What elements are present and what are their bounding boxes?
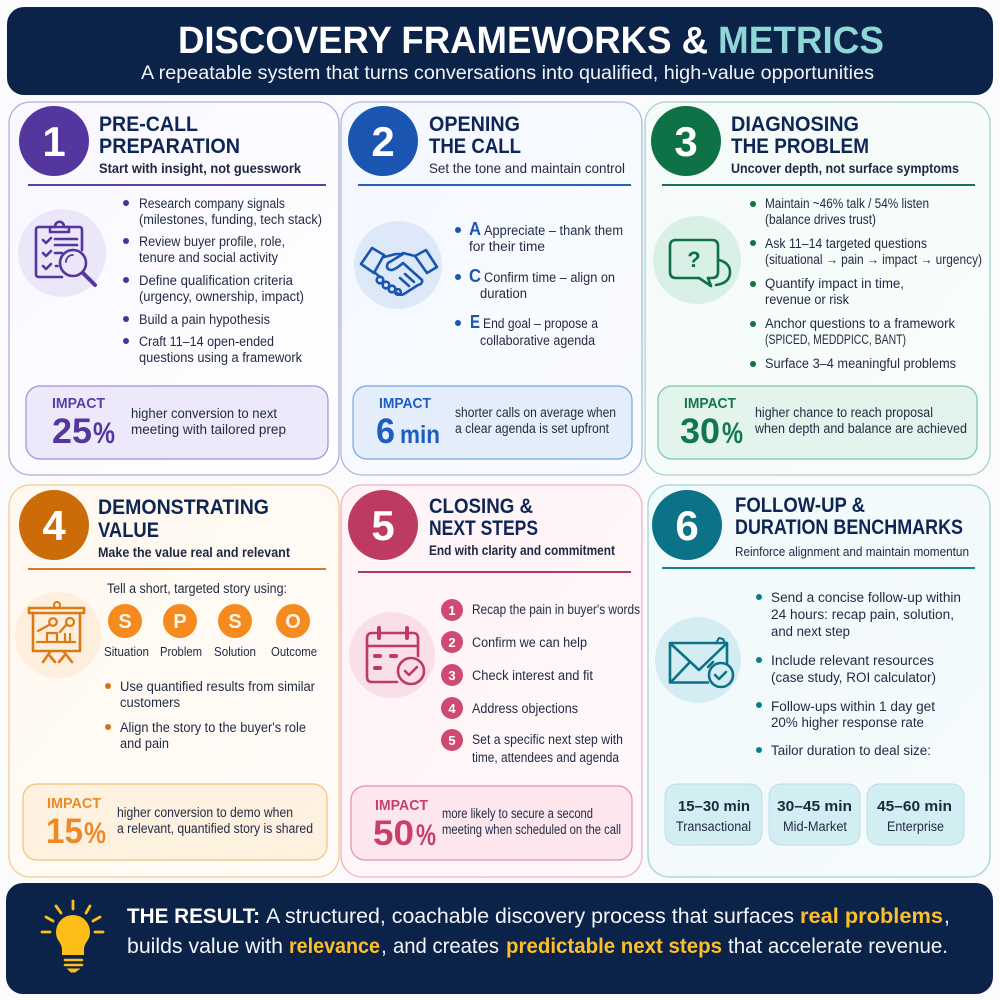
number badge 2: 2 [371, 118, 395, 165]
SPSO framework [104, 604, 317, 659]
heading: VALUE [98, 519, 159, 542]
number badge 5: 5 [371, 502, 395, 549]
numbered steps: Check interest and fit [472, 668, 593, 683]
impact callout: 6 [376, 412, 395, 451]
icon: handshake [354, 221, 442, 309]
impact callout: higher conversion to next [131, 406, 277, 421]
impact callout: % [93, 417, 115, 450]
impact callout: 25 [52, 412, 92, 451]
numbered steps: 2 [448, 635, 456, 650]
heading: FOLLOW-UP & [735, 494, 865, 517]
result text: that accelerate revenue. [728, 935, 948, 958]
result text: relevance [289, 935, 380, 958]
heading: THE CALL [429, 135, 521, 158]
bullet list: (case study, ROI calculator) [771, 670, 936, 685]
heading: THE PROBLEM [731, 135, 869, 158]
result text [127, 905, 950, 958]
duration pill: transactional: Transactional [676, 819, 751, 834]
impact callout: % [722, 417, 743, 450]
numbered steps: 3 [448, 668, 456, 683]
result text: real problems [800, 905, 943, 928]
heading [429, 113, 521, 158]
impact callout: IMPACT [47, 795, 101, 812]
impact callout: % [84, 817, 106, 850]
ACE list: collaborative agenda [480, 333, 595, 348]
bullet list: Build a pain hypothesis [139, 312, 270, 327]
numbered steps: Confirm we can help [472, 635, 587, 650]
result text: predictable next steps [506, 935, 722, 958]
impact callout [658, 386, 977, 459]
impact callout: when depth and balance are achieved [754, 421, 967, 436]
bullet list: Ask 11–14 targeted questions [765, 236, 927, 251]
bullet list: (milestones, funding, tech stack) [139, 212, 322, 227]
number badge 6: 6 [675, 502, 699, 549]
tagline: Make the value real and relevant [98, 544, 290, 560]
SPSO framework: O [285, 611, 301, 633]
heading: OPENING [429, 113, 520, 136]
SPSO framework: Outcome [271, 645, 317, 659]
heading [731, 113, 869, 158]
bullet list [750, 196, 982, 371]
bullet list: and pain [120, 736, 169, 751]
tagline: End with clarity and commitment [429, 542, 615, 558]
duration pill: mid-market: Mid-Market [783, 819, 847, 834]
bullet list: Send a concise follow-up within [771, 590, 961, 605]
bullet list: revenue or risk [765, 292, 849, 307]
number badge 5 [348, 490, 418, 560]
impact callout: % [416, 819, 436, 852]
bullet list: Tailor duration to deal size: [771, 743, 931, 758]
panel: 6 follow-up and duration benchmarks [648, 485, 990, 877]
panel: 3 diagnosing the problem [645, 102, 990, 475]
result text: , [944, 905, 950, 928]
result text: , [381, 935, 387, 958]
bullet list: Surface 3–4 meaningful problems [765, 356, 956, 371]
result text: A structured, coachable discovery process that surfaces [266, 905, 794, 928]
impact callout: meeting when scheduled on the call [442, 822, 621, 837]
bullet list: Anchor questions to a framework [765, 316, 955, 331]
bullet list: 20% higher response rate [771, 715, 924, 730]
icon: presentation board [15, 592, 101, 678]
impact callout [353, 386, 632, 459]
bullet list: Use quantified results from similar [120, 679, 315, 694]
ACE list: A [469, 219, 481, 239]
tagline: Start with insight, not guesswork [99, 160, 301, 176]
number badge 2 [348, 106, 418, 176]
duration pill: transactional: 15–30 min [678, 798, 750, 815]
impact callout: 15 [46, 812, 83, 851]
heading: PRE-CALL [99, 113, 198, 136]
numbered steps: 4 [448, 701, 456, 716]
number badge 3 [651, 106, 721, 176]
number badge 3: 3 [674, 118, 698, 165]
bullet list: Research company signals [139, 196, 285, 211]
bullet list: Follow-ups within 1 day get [771, 699, 935, 714]
panel: 4 demonstrating value [9, 485, 339, 877]
heading: DIAGNOSING [731, 113, 859, 136]
SPSO framework: Solution [214, 645, 256, 659]
bullet list: tenure and social activity [139, 250, 278, 265]
heading: NEXT STEPS [429, 517, 538, 540]
icon: calendar with check [349, 612, 435, 698]
SPSO framework: Problem [160, 645, 202, 659]
ACE list: duration [480, 286, 527, 301]
panel: 1 pre-call preparation [9, 102, 339, 475]
impact callout: more likely to secure a second [442, 806, 593, 821]
impact callout: IMPACT [375, 797, 428, 814]
bullet list [756, 590, 961, 758]
icon: question speech bubbles: ? [687, 247, 701, 272]
heading: DURATION BENCHMARKS [735, 516, 963, 539]
ACE list: for their time [469, 239, 545, 254]
impact callout: a relevant, quantified story is shared [117, 821, 313, 836]
impact callout: 50 [373, 814, 414, 853]
bullet list: (urgency, ownership, impact) [139, 289, 304, 304]
bullet list: Define qualification criteria [139, 273, 293, 288]
ACE list: End goal – propose a [483, 316, 598, 331]
SPSO framework: P [173, 611, 187, 633]
duration pill: enterprise: 45–60 min [877, 798, 952, 815]
duration pill: enterprise [867, 784, 964, 845]
bullet list: Align the story to the buyer's role [120, 720, 306, 735]
impact callout: IMPACT [52, 395, 105, 412]
impact callout: shorter calls on average when [455, 405, 616, 420]
impact callout: min [400, 421, 440, 449]
numbered steps: time, attendees and agenda [472, 750, 619, 765]
SPSO framework: S [118, 611, 132, 633]
bullet list: customers [120, 695, 180, 710]
bullet list: 24 hours: recap pain, solution, [771, 607, 954, 622]
impact callout: a clear agenda is set upfront [455, 421, 609, 436]
number badge 1: 1 [42, 118, 66, 165]
SPSO framework: Situation [104, 645, 149, 659]
icon: light bulb [42, 901, 103, 972]
heading: PREPARATION [99, 135, 240, 158]
tagline: Reinforce alignment and maintain momentun [735, 544, 969, 559]
tagline: Set the tone and maintain control [429, 160, 625, 176]
duration pill: mid-market: 30–45 min [777, 798, 852, 815]
icon: clipboard and magnifier [18, 209, 106, 297]
ACE list: C [469, 266, 481, 286]
result text: THE RESULT: [127, 905, 260, 928]
header banner [7, 7, 993, 95]
tagline: Uncover depth, not surface symptoms [731, 160, 959, 176]
impact callout: higher chance to reach proposal [755, 405, 933, 420]
duration pill: mid-market [769, 784, 860, 845]
panel: 5 closing and next steps [341, 485, 642, 877]
result text: builds value with [127, 935, 283, 958]
result text: and creates [393, 935, 499, 958]
ACE list [455, 219, 623, 348]
bullet list: questions using a framework [139, 350, 302, 365]
bullet list: (balance drives trust) [765, 212, 876, 227]
bullet list: Craft 11–14 open-ended [139, 334, 274, 349]
impact callout [351, 786, 632, 860]
bullet list [123, 196, 322, 365]
impact callout [26, 386, 328, 459]
numbered steps [441, 599, 640, 765]
icon: envelope with check [655, 617, 741, 703]
bullet list [105, 679, 315, 751]
title: DISCOVERY FRAMEWORKS & [178, 20, 708, 62]
ACE list: E [470, 312, 480, 332]
heading: CLOSING & [429, 495, 533, 518]
bullet list: (SPICED, MEDDPICC, BANT) [765, 332, 906, 347]
number badge 4 [19, 490, 89, 560]
numbered steps: 5 [448, 733, 456, 748]
number badge 6 [652, 490, 722, 560]
bullet list: Review buyer profile, role, [139, 234, 285, 249]
number badge 1 [19, 106, 89, 176]
icon: question speech bubbles [653, 216, 741, 304]
impact callout: meeting with tailored prep [131, 422, 286, 437]
footer banner: the result [6, 883, 993, 994]
heading [735, 494, 963, 539]
title accent: METRICS [718, 20, 884, 62]
bullet list: Include relevant resources [771, 653, 934, 668]
numbered steps: Set a specific next step with [472, 732, 623, 747]
subtitle: A repeatable system that turns conversations into qualified, high-value opportunities [141, 63, 874, 84]
numbered steps: Recap the pain in buyer's words [472, 602, 640, 617]
ACE list: Confirm time – align on [484, 270, 615, 285]
duration pill: transactional [665, 784, 762, 845]
impact callout: IMPACT [379, 395, 431, 412]
heading [99, 113, 240, 158]
impact callout: higher conversion to demo when [117, 805, 293, 820]
duration pill: enterprise: Enterprise [887, 819, 944, 834]
number badge 4: 4 [42, 502, 66, 549]
heading [429, 495, 538, 540]
impact callout [23, 784, 327, 860]
impact callout: 30 [680, 412, 720, 451]
bullet list: Quantify impact in time, [765, 276, 904, 291]
numbered steps: Address objections [472, 701, 578, 716]
panel: 2 opening the call [341, 102, 642, 475]
impact callout: IMPACT [684, 395, 736, 412]
heading: DEMONSTRATING [98, 496, 269, 519]
ACE list: Appreciate – thank them [484, 223, 623, 238]
bullet list: Maintain ~46% talk / 54% listen [765, 196, 929, 211]
bullet list: and next step [771, 624, 850, 639]
SPSO framework: S [228, 611, 242, 633]
heading [98, 496, 269, 542]
numbered steps: 1 [448, 603, 456, 618]
story intro: Tell a short, targeted story using: [107, 581, 287, 596]
